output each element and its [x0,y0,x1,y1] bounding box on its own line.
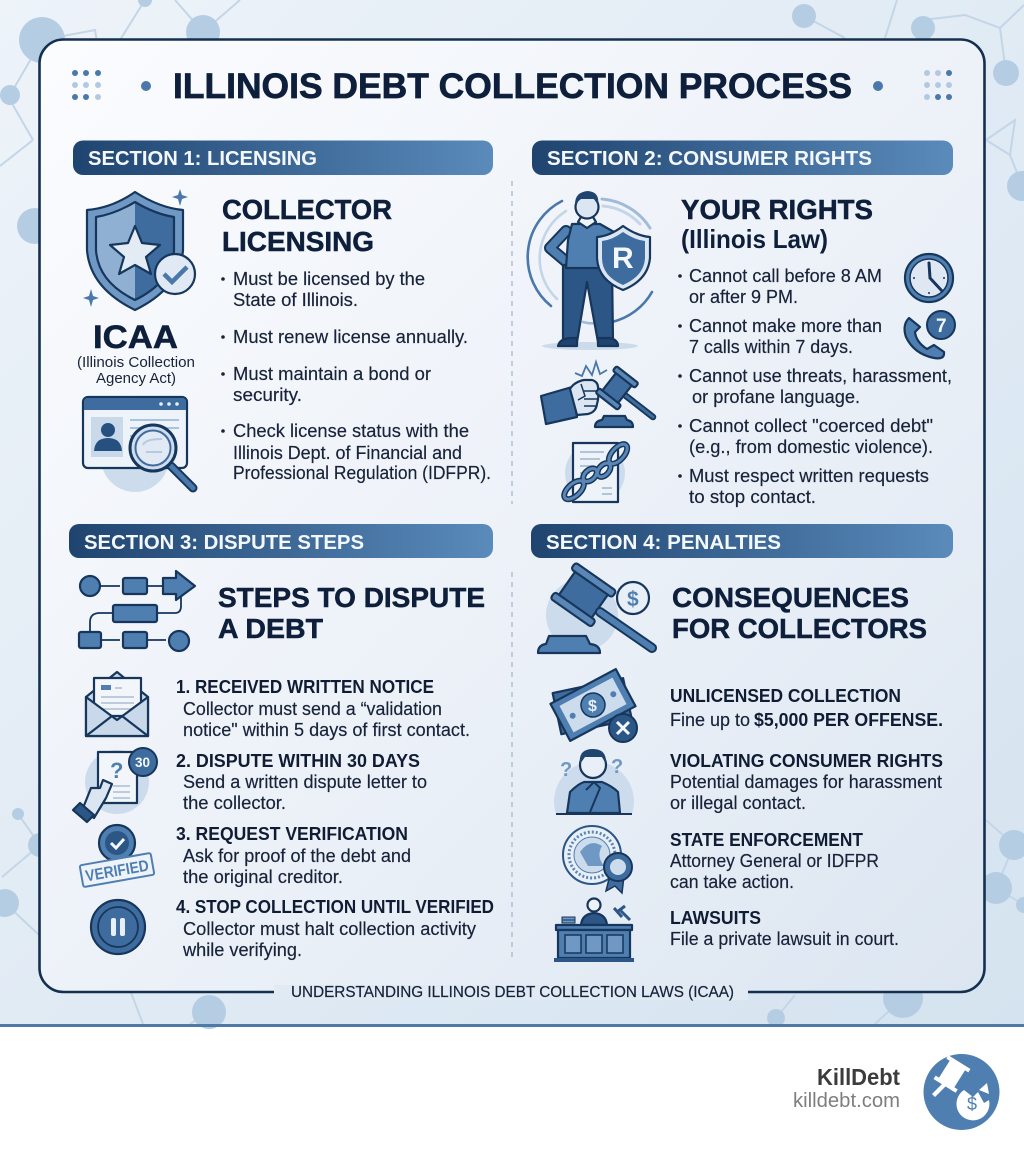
brand name [793,1064,900,1112]
bullet list: consumer rights: or profane language. [692,386,860,407]
step list: notice" within 5 days of first contact. [183,719,470,740]
section 3 header bar [69,524,493,558]
icon: document with 30 day badge: 30 [135,755,150,770]
bullet list: licensing rules: Professional Regulation (IDFPR). [233,462,491,483]
icon: license lookup [83,397,193,492]
icon: envelope with notice [86,672,148,736]
heading: consequences for collectors: CONSEQUENCES [672,582,909,613]
bullet list: licensing rules: Check license status with the [233,420,469,441]
section 2 header bar: SECTION 2: CONSUMER RIGHTS [547,147,872,170]
heading: consequences for collectors [672,582,927,644]
bullet list: licensing rules: Must maintain a bond or [233,363,431,384]
step list: Collector must send a “validation [183,698,442,719]
ICAA label [77,319,195,387]
heading: consequences for collectors: FOR COLLECTORS [672,613,927,644]
icon: shield with star and check [83,189,195,310]
title: ILLINOIS DEBT COLLECTION PROCESS [173,67,852,106]
step list: while verifying. [182,939,302,960]
penalty list: VIOLATING CONSUMER RIGHTS [670,750,943,771]
heading: your rights: YOUR RIGHTS [681,194,873,225]
icon: state seal with rosette [563,826,632,893]
heading: steps to dispute a debt: STEPS TO DISPUTE [218,582,485,613]
penalty list: Potential damages for harassment [670,771,942,792]
ICAA label: ICAA [93,319,178,355]
step list: 1. RECEIVED WRITTEN NOTICE [176,676,434,697]
section 1 header bar: SECTION 1: LICENSING [88,147,317,170]
bullet list: licensing rules: security. [233,384,302,405]
penalty list: $5,000 PER OFFENSE. [754,709,943,730]
bullet list: consumer rights: Cannot call before 8 AM [689,265,882,286]
step list: 2. DISPUTE WITHIN 30 DAYS [176,750,420,771]
icon: document with 30 day badge: ? [110,758,123,783]
step list: Send a written dispute letter to [183,771,427,792]
penalty list: or illegal contact. [670,792,806,813]
panel footer caption: UNDERSTANDING ILLINOIS DEBT COLLECTION LAWS (ICAA) [291,984,734,1001]
section 3 header bar: SECTION 3: DISPUTE STEPS [84,531,364,554]
penalty list [670,685,943,949]
icon: gavel with dollar coin [538,562,652,653]
bullet list: consumer rights: Must respect written requests [689,465,929,486]
icon: process flowchart [79,571,195,651]
footer band divider [0,1024,1024,1027]
step list: 4. STOP COLLECTION UNTIL VERIFIED [176,896,494,917]
heading: steps to dispute a debt [218,582,485,644]
icon: document with 30 day badge [73,748,157,822]
panel: section 2 consumer rights [528,140,955,507]
step list: the collector. [183,792,286,813]
decorative dot grid right [924,70,952,100]
icon: phone with 7 badge: 7 [936,316,947,337]
icon: confused person: ? [560,759,572,781]
icon: KillDebt logo [924,1054,1000,1130]
icon: document with broken chain [561,441,630,503]
panel: section 4 penalties [531,524,953,962]
bullet list: licensing rules [221,268,491,483]
icon: KillDebt logo: $ [967,1094,977,1114]
panel: section 3 dispute steps [69,524,494,960]
heading: collector licensing: LICENSING [222,226,374,257]
icon: person with R shield [528,191,652,350]
penalty list: UNLICENSED COLLECTION [670,685,901,706]
penalty list: STATE ENFORCEMENT [670,829,864,850]
icon: money with x badge [550,669,637,742]
main panel [40,40,984,992]
icon: confused person: ? [611,756,623,778]
penalty list: File a private lawsuit in court. [670,928,899,949]
section 4 header bar: SECTION 4: PENALTIES [546,531,781,554]
bullet list: consumer rights: Cannot use threats, harassment, [689,365,952,386]
bullet list: consumer rights: (e.g., from domestic violence). [689,436,933,457]
ICAA label: (Illinois Collection [77,355,195,371]
bullet list: consumer rights: Cannot make more than [689,315,882,336]
step list: Collector must halt collection activity [183,918,477,939]
bullet list: licensing rules: Must renew license annually. [233,326,468,347]
bullet list: licensing rules: Illinois Dept. of Financial and [233,442,462,463]
step list: Ask for proof of the debt and [183,845,411,866]
bullet list: consumer rights: Cannot collect "coerced debt" [689,415,933,436]
brand name: killdebt.com [793,1090,900,1112]
icon: fist and gavel [541,362,653,427]
icon: money with x badge: $ [588,698,597,715]
icon: confused person [554,749,634,814]
brand name: KillDebt [817,1064,900,1090]
penalty list: Attorney General or IDFPR [670,850,879,871]
icon: gavel with dollar coin: $ [627,588,639,611]
section 4 header bar [531,524,953,558]
heading: collector licensing: COLLECTOR [222,194,392,225]
bullet list: licensing rules: State of Illinois. [233,289,358,310]
decorative dot grid left [72,70,101,100]
icon: clock [905,254,953,302]
panel: section 1 licensing [73,140,493,492]
bullet list: consumer rights: 7 calls within 7 days. [689,336,853,357]
heading: steps to dispute a debt: A DEBT [218,613,323,644]
icon: phone with 7 badge [905,311,955,358]
step list: 3. REQUEST VERIFICATION [176,823,408,844]
bullet list: consumer rights: to stop contact. [689,486,816,507]
icon: person with R shield: R [612,242,634,275]
section 1 header bar [73,140,493,175]
icon: judge at courtroom bench [554,898,634,962]
heading: your rights [681,194,873,254]
section 2 header bar [532,140,953,175]
bullet list: consumer rights: or after 9 PM. [689,286,798,307]
penalty list: can take action. [670,871,794,892]
ICAA label: Agency Act) [96,371,176,387]
heading: your rights: (Illinois Law) [681,224,828,254]
bullet list: licensing rules: Must be licensed by the [233,268,425,289]
step list [176,676,494,960]
icon: verified stamp: VERIFIED [84,858,150,885]
heading: collector licensing [222,194,392,257]
penalty list: Fine up to [670,709,750,730]
icon: pause button [91,900,145,954]
penalty list: LAWSUITS [670,907,761,928]
icon: verified stamp [80,825,154,887]
step list: the original creditor. [183,866,343,887]
bullet list: consumer rights [678,265,952,507]
